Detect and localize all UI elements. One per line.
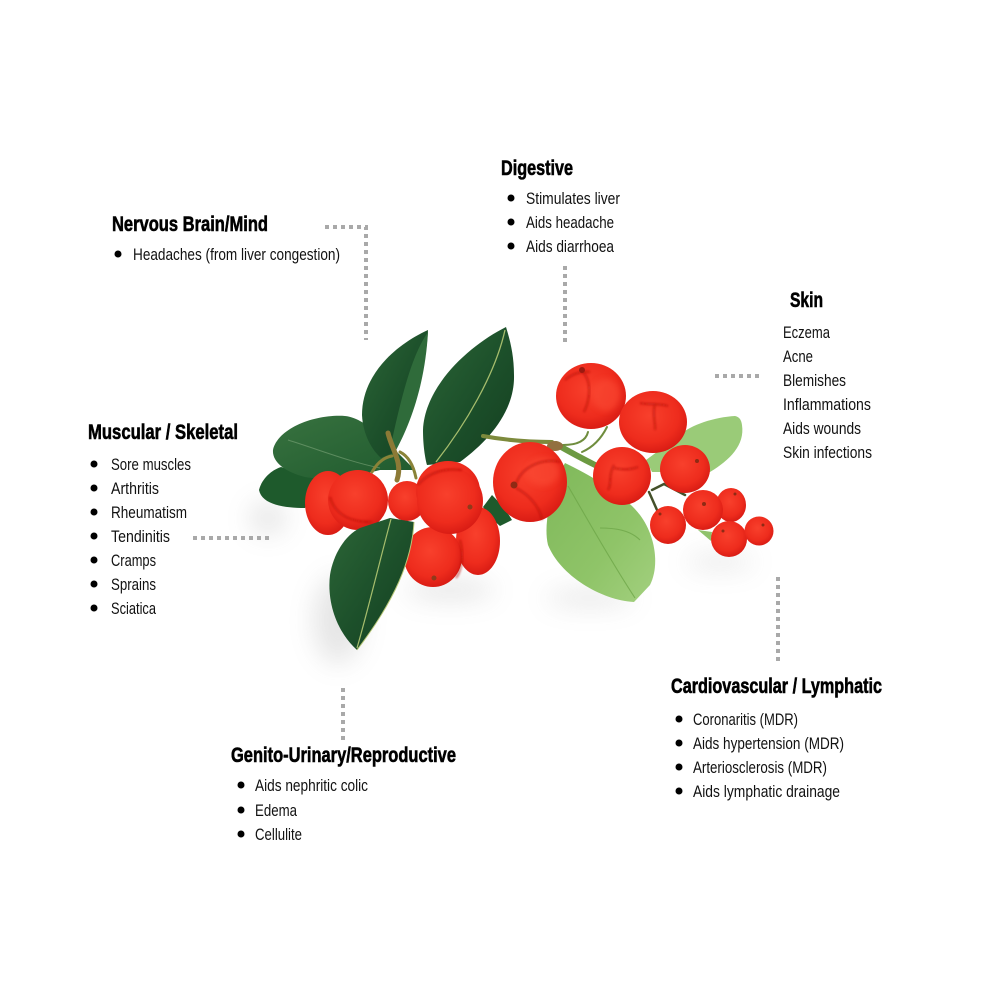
leaf: wide left	[273, 416, 415, 478]
leaf: light green top right	[646, 416, 742, 472]
text block: skin	[783, 289, 872, 462]
heading: genito-urinary: Genito-Urinary/Reproductive	[231, 744, 456, 767]
list: muscular skeletal: Rheumatism	[111, 503, 187, 522]
list: digestive: Aids headache	[526, 213, 614, 232]
text block: nervous	[112, 213, 340, 264]
heading: nervous: Nervous Brain/Mind	[112, 213, 268, 236]
berry: large center	[493, 442, 567, 522]
list: muscular skeletal: Cramps	[111, 551, 156, 570]
list: skin	[783, 323, 872, 462]
list: cardiovascular: Aids hypertension (MDR)	[693, 734, 844, 753]
list: skin: Acne	[783, 347, 813, 366]
connector: cardiovascular	[776, 577, 780, 662]
list: genito-urinary	[238, 776, 368, 844]
plant illustration: wintergreen sprig	[250, 327, 774, 664]
heading: skin: Skin	[790, 289, 823, 312]
stems	[372, 427, 685, 510]
connector: nervous	[325, 227, 366, 340]
leaf: lower back left	[259, 467, 322, 508]
list: skin: Eczema	[783, 323, 830, 342]
connector: muscular	[193, 536, 270, 540]
list: cardiovascular	[676, 710, 844, 801]
list: skin: Inflammations	[783, 395, 871, 414]
leaf: small dark between berries	[483, 495, 512, 526]
list: digestive	[508, 189, 620, 256]
list: genito-urinary: Cellulite	[255, 825, 302, 844]
heading: muscular skeletal: Muscular / Skeletal	[88, 421, 238, 444]
list: cardiovascular: Arteriosclerosis (MDR)	[693, 758, 827, 777]
list: skin: Blemishes	[783, 371, 846, 390]
list: genito-urinary: Edema	[255, 801, 297, 820]
leaf: large light green bottom	[546, 463, 655, 602]
list: muscular skeletal: Sore muscles	[111, 455, 191, 474]
connector: digestive	[563, 266, 567, 342]
text block: genito-urinary	[231, 744, 456, 844]
leaf: bottom front	[329, 518, 414, 650]
berry cluster: left	[305, 461, 500, 587]
text block: muscular skeletal	[88, 421, 238, 618]
leaf: upper center right	[423, 327, 514, 465]
list: muscular skeletal: Sprains	[111, 575, 156, 594]
soft drop shadows	[250, 502, 755, 664]
berry cluster: right	[556, 363, 774, 557]
text block: digestive	[501, 157, 620, 256]
heading: digestive: Digestive	[501, 157, 573, 180]
leaf: small pale sliver	[698, 530, 712, 541]
leaf: upper center left	[362, 330, 428, 458]
list: muscular skeletal	[90, 455, 191, 618]
list: digestive: Aids diarrhoea	[526, 237, 614, 256]
connector: genito-urinary	[341, 688, 345, 740]
list: nervous: Headaches (from liver congestion)	[133, 245, 340, 264]
list: muscular skeletal: Sciatica	[111, 599, 156, 618]
list: muscular skeletal: Arthritis	[111, 479, 159, 498]
text block: cardiovascular	[671, 675, 882, 801]
connector: skin	[715, 374, 760, 378]
list: cardiovascular: Aids lymphatic drainage	[693, 782, 840, 801]
list: skin: Aids wounds	[783, 419, 861, 438]
list: skin: Skin infections	[783, 443, 872, 462]
heading: cardiovascular: Cardiovascular / Lymphatic	[671, 675, 882, 698]
list: genito-urinary: Aids nephritic colic	[255, 776, 368, 795]
list: cardiovascular: Coronaritis (MDR)	[693, 710, 798, 729]
list: muscular skeletal: Tendinitis	[111, 527, 170, 546]
list: digestive: Stimulates liver	[526, 189, 620, 208]
